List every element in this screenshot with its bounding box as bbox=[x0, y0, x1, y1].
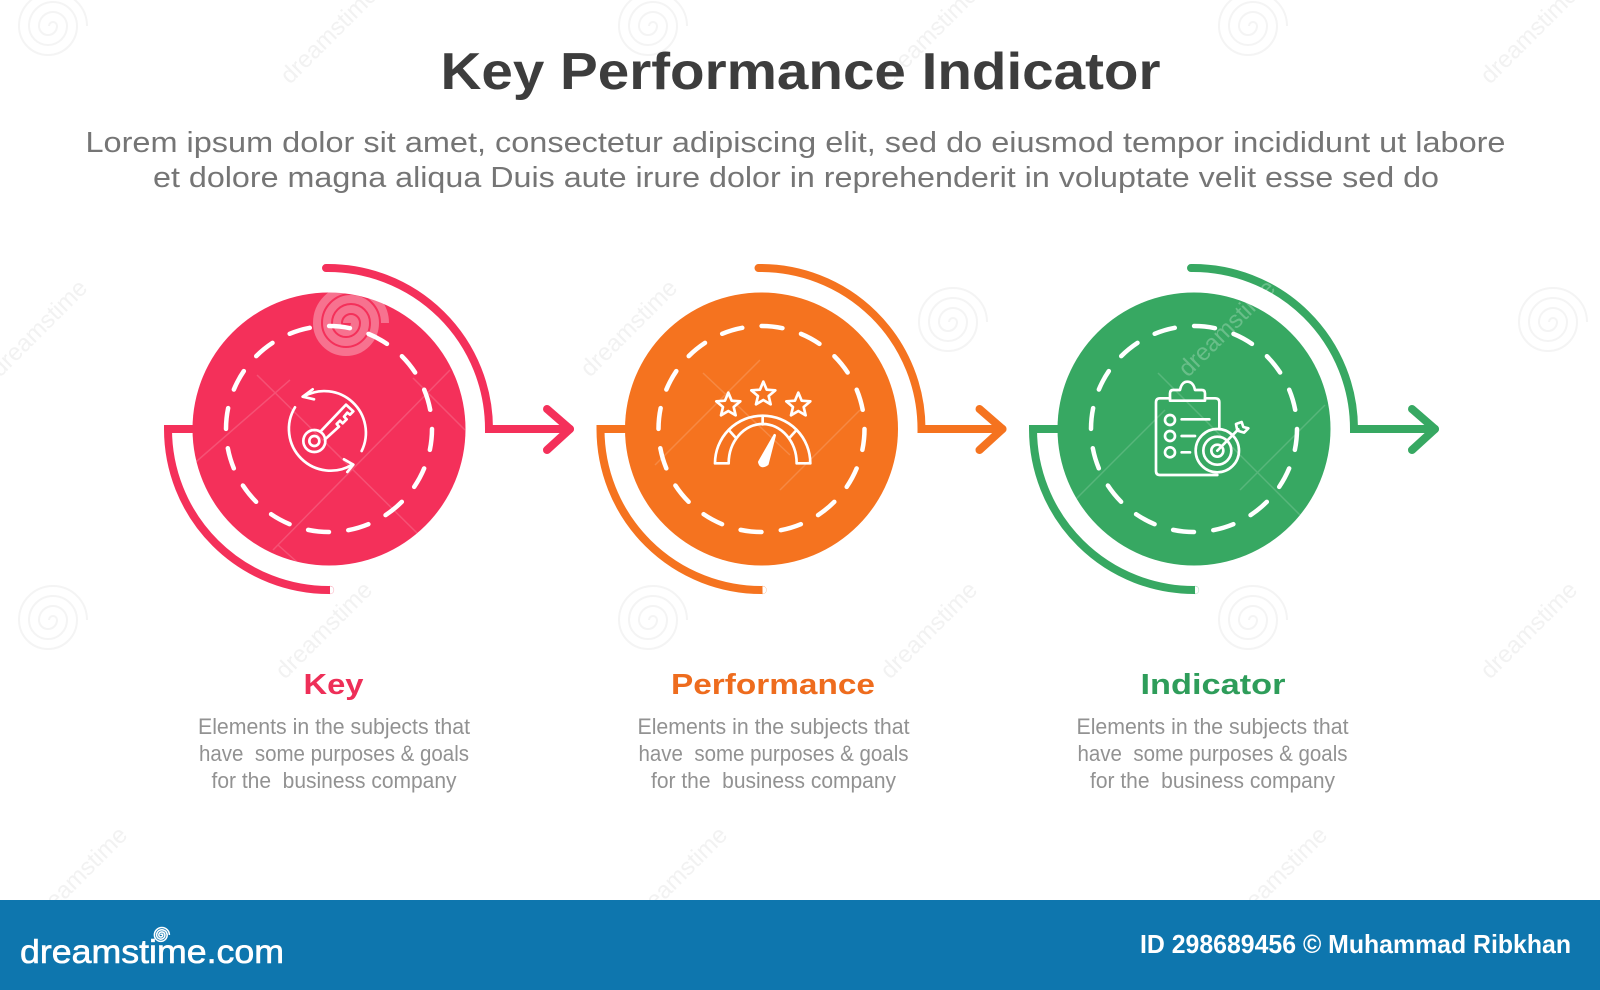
heading: performance: Performance bbox=[671, 669, 875, 701]
heading: key: Key bbox=[304, 669, 364, 701]
description: key: have some purposes & goals bbox=[199, 741, 469, 766]
watermark pattern: dreamstime bbox=[875, 576, 983, 684]
description: indicator: have some purposes & goals bbox=[1078, 741, 1348, 766]
watermark pattern: dreamstime bbox=[25, 821, 133, 929]
footer banner bbox=[0, 900, 1600, 990]
heading: indicator: Indicator bbox=[1140, 669, 1286, 701]
footer credit: ID 298689456 © Muhammad Ribkhan bbox=[1140, 929, 1571, 959]
dashed ring: indicator bbox=[1091, 326, 1297, 532]
watermark pattern: dreamstime bbox=[625, 821, 733, 929]
watermark pattern: dreamstime bbox=[1225, 821, 1333, 929]
icon: gauge with stars bbox=[715, 382, 810, 466]
description: key bbox=[198, 714, 470, 793]
watermark on circle: dreamstime bbox=[1173, 274, 1281, 382]
icon: key with rotating arrows bbox=[289, 389, 366, 472]
panel: performance bbox=[600, 268, 1002, 590]
swirl arcs and arrow: key bbox=[168, 268, 570, 590]
dashed ring: key bbox=[226, 326, 432, 532]
description: indicator bbox=[1076, 714, 1348, 793]
description: performance: for the business company bbox=[651, 768, 896, 793]
subtitle text bbox=[86, 127, 1506, 194]
description: indicator: Elements in the subjects that bbox=[1076, 714, 1348, 739]
subtitle text: et dolore magna aliqua Duis aute irure dolor in reprehenderit in voluptate velit esse sed do bbox=[153, 162, 1439, 194]
subtitle text: Lorem ipsum dolor sit amet, consectetur adipiscing elit, sed do eiusmod tempor incididunt ut labore bbox=[86, 127, 1506, 159]
watermark pattern: dreamstime bbox=[1475, 576, 1583, 684]
dashed ring: performance bbox=[658, 326, 864, 532]
description: indicator: for the business company bbox=[1090, 768, 1335, 793]
panel: indicator bbox=[1033, 268, 1435, 590]
description: performance: Elements in the subjects that bbox=[638, 714, 910, 739]
description: key: Elements in the subjects that bbox=[198, 714, 470, 739]
icon: clipboard with target bbox=[1156, 382, 1248, 475]
title: Key Performance Indicator bbox=[440, 43, 1160, 101]
swirl arcs and arrow: indicator bbox=[1033, 268, 1435, 590]
watermark on circle bbox=[190, 289, 465, 562]
watermark on circle bbox=[655, 360, 860, 490]
description: key: for the business company bbox=[212, 768, 456, 793]
description: performance: have some purposes & goals bbox=[638, 741, 908, 766]
watermark pattern: dreamstime bbox=[575, 274, 683, 382]
circle: key bbox=[192, 292, 466, 566]
swirl arcs and arrow: performance bbox=[600, 268, 1002, 590]
footer logo: dreamstime.com bbox=[20, 933, 284, 970]
watermark pattern: dreamstime bbox=[270, 576, 378, 684]
circle: performance bbox=[625, 292, 898, 566]
watermark on circle bbox=[1075, 274, 1325, 515]
description: performance bbox=[638, 714, 910, 793]
circle: indicator bbox=[1058, 292, 1330, 566]
panel: key bbox=[168, 268, 570, 590]
